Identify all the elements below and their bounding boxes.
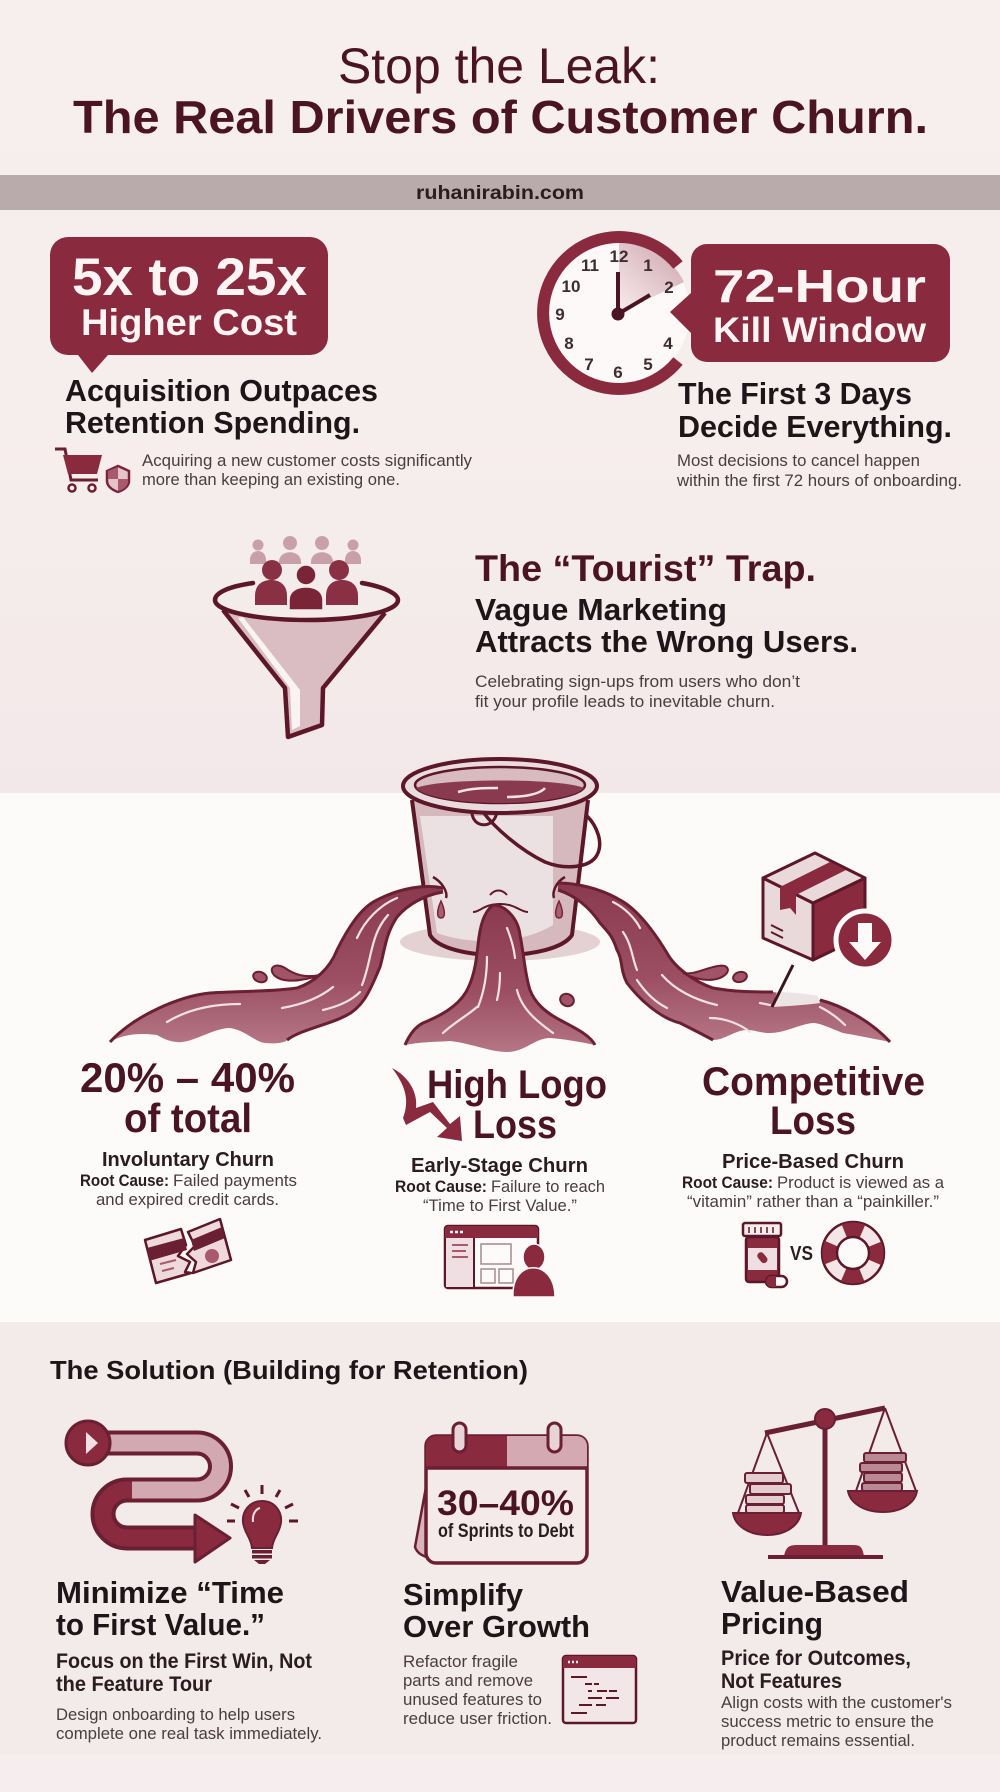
heading: minimize time to first value: Minimize “Time [56, 1575, 284, 1610]
text: early-stage root cause: Failure to reach [491, 1178, 605, 1196]
column: value-based pricing [721, 1408, 952, 1750]
icon: clock [543, 237, 690, 389]
text: price-based root cause: “vitamin” rather than a “painkiller.” [687, 1193, 939, 1211]
subheading: focus on first win: Focus on the First Win, Not [56, 1649, 312, 1673]
icon: box with down arrow [763, 853, 894, 969]
panel: the solution [50, 1355, 952, 1750]
text: refactor body: unused features to [403, 1690, 542, 1709]
stat: 20-40 percent: 20% – 40% [80, 1054, 295, 1101]
icon: clock: 10 [562, 277, 580, 296]
subheading: focus on first win: the Feature Tour [56, 1672, 213, 1696]
text: tourist body: fit your profile leads to inevitable churn. [475, 693, 775, 711]
icon: balance scale [733, 1408, 917, 1557]
heading: value-based pricing: Pricing [721, 1606, 823, 1641]
heading: competitive loss: Competitive [702, 1060, 925, 1104]
subheading: vague marketing: Vague Marketing [475, 592, 727, 627]
leak stream: center [405, 905, 595, 1052]
panel: tourist trap [215, 536, 858, 737]
text: vs: VS [790, 1243, 813, 1265]
heading: value-based pricing [721, 1574, 909, 1641]
pointer line to stream [772, 965, 793, 1007]
text: pricing body: product remains essential. [721, 1731, 915, 1750]
leak stream: right [558, 883, 890, 1042]
speech bubble: 72-hour kill window: Kill Window [713, 311, 927, 350]
website band [0, 175, 1000, 210]
website band: ruhanirabin.com [416, 182, 584, 204]
icon: clock: 1 [643, 256, 653, 275]
text: price-based root cause [682, 1174, 945, 1211]
panel: price-based churn [682, 1060, 945, 1287]
leak stream: left [110, 886, 443, 1043]
heading: simplify over growth: Simplify [403, 1577, 524, 1612]
heading: the solution: The Solution (Building for Retention) [50, 1355, 528, 1385]
speech bubble: 5x to 25x [50, 237, 328, 373]
icon: winding path arrow [66, 1421, 230, 1562]
subheading: price for outcomes: Price for Outcomes, [721, 1646, 911, 1670]
speech bubble: 72-hour kill window [670, 244, 950, 362]
icon: code window [563, 1656, 636, 1723]
heading: minimize time to first value [56, 1575, 284, 1642]
icon: funnel with users [215, 536, 398, 737]
text: 72 hour body: Most decisions to cancel happen [677, 452, 920, 470]
subheading: price-based churn: Price-Based Churn [722, 1150, 904, 1173]
icon: falling arrow [392, 1068, 462, 1141]
text: price-based root cause: Product is viewed as a [777, 1174, 945, 1192]
text: acquisition body: Acquiring a new customer costs significantly [142, 451, 472, 470]
heading: high logo loss: Loss [473, 1103, 557, 1147]
heading: first 3 days: The First 3 Days [678, 377, 912, 411]
text: onboarding body [56, 1705, 322, 1743]
text: involuntary root cause: and expired credit cards. [96, 1191, 279, 1209]
panel: 72 hour window [543, 237, 962, 490]
speech bubble: 72-hour kill window: 72-Hour [713, 260, 926, 312]
text: refactor body: reduce user friction. [403, 1709, 552, 1728]
panel: acquisition cost [50, 237, 472, 492]
heading: value-based pricing: Value-Based [721, 1574, 909, 1609]
subheading: price for outcomes [721, 1646, 911, 1693]
icon: calendar: of Sprints to Debt [438, 1521, 575, 1542]
icon: clock: 2 [664, 278, 674, 297]
icon: clock: 9 [555, 305, 565, 324]
text: pricing body: success metric to ensure the [721, 1712, 934, 1731]
heading: first 3 days: Decide Everything. [678, 410, 952, 444]
text: involuntary root cause: Failed payments [173, 1172, 297, 1190]
icon: vitamin bottle [743, 1223, 787, 1287]
icon: shopping cart [55, 449, 102, 492]
text: refactor body: Refactor fragile [403, 1652, 518, 1671]
text: pricing body: Align costs with the customer's [721, 1693, 952, 1712]
text: onboarding body: Design onboarding to help users [56, 1705, 295, 1724]
text: 72 hour body [676, 452, 962, 490]
stat: 20-40 percent [80, 1054, 295, 1141]
text: acquisition body [142, 451, 472, 489]
heading: acquisition outpaces retention: Acquisition Outpaces [65, 374, 378, 408]
icon: shield [107, 466, 129, 492]
icon: broken credit card [145, 1219, 231, 1283]
text: tourist body [475, 673, 800, 711]
heading: high logo loss: High Logo [427, 1063, 607, 1107]
subheading: focus on first win [56, 1649, 312, 1696]
text: 72 hour body: within the first 72 hours of onboarding. [676, 472, 962, 490]
text: tourist body: Celebrating sign-ups from users who don’t [475, 673, 800, 691]
illustration: leaking bucket [110, 759, 894, 1052]
heading: simplify over growth: Over Growth [403, 1609, 590, 1644]
title: Stop the Leak: [338, 38, 660, 94]
heading: acquisition outpaces retention: Retention Spending. [65, 406, 360, 440]
speech bubble: 5x to 25x: Higher Cost [81, 302, 297, 343]
bucket [403, 759, 600, 955]
icon: clock: 8 [564, 334, 574, 353]
heading: tourist trap: The “Tourist” Trap. [475, 548, 816, 589]
subheading: price for outcomes: Not Features [721, 1669, 842, 1693]
subheading: vague marketing: Attracts the Wrong Users. [475, 624, 858, 659]
heading: high logo loss [427, 1063, 607, 1147]
text: onboarding body: complete one real task immediately. [56, 1724, 322, 1743]
subheading: involuntary churn: Involuntary Churn [102, 1148, 274, 1171]
icon: calendar [415, 1423, 587, 1563]
title [73, 38, 928, 143]
speech bubble: 5x to 25x: 5x to 25x [72, 248, 308, 307]
icon: clock: 12 [610, 247, 628, 266]
icon: clock: 11 [581, 256, 599, 275]
icon: clock: 7 [584, 355, 594, 374]
icon: clock: 6 [613, 363, 623, 382]
icon: app window with user [445, 1226, 555, 1297]
subheading: early-stage churn: Early-Stage Churn [411, 1154, 588, 1177]
panel: involuntary churn [80, 1054, 297, 1283]
icon: calendar: 30–40% [437, 1484, 574, 1523]
text: early-stage root cause [395, 1178, 605, 1215]
heading: competitive loss: Loss [770, 1099, 856, 1143]
stat: 20-40 percent: of total [124, 1095, 252, 1141]
heading: competitive loss [702, 1060, 925, 1143]
icon: light bulb [227, 1485, 298, 1564]
text: involuntary root cause [80, 1172, 297, 1209]
panel: early-stage churn [392, 1063, 607, 1297]
text: price-based root cause: Root Cause: [682, 1174, 773, 1192]
icon: lifebuoy [822, 1222, 884, 1284]
subheading: vague marketing [475, 592, 858, 659]
text: early-stage root cause: Root Cause: [395, 1178, 487, 1196]
text: refactor body [403, 1652, 552, 1728]
text: acquisition body: more than keeping an existing one. [142, 470, 400, 489]
heading: minimize time to first value: to First Value.” [56, 1607, 265, 1642]
column: simplify over growth [403, 1423, 636, 1728]
text: involuntary root cause: Root Cause: [80, 1172, 169, 1190]
icon: clock: 4 [663, 334, 673, 353]
column: minimize time to first value [56, 1421, 322, 1743]
heading: acquisition outpaces retention [65, 374, 378, 440]
splash droplets [252, 966, 748, 1008]
bucket shadow [400, 923, 600, 961]
heading: first 3 days [678, 377, 952, 444]
icon: clock: 5 [643, 355, 653, 374]
title: The Real Drivers of Customer Churn. [73, 91, 928, 143]
text: pricing body [721, 1693, 952, 1750]
text: early-stage root cause: “Time to First Value.” [423, 1197, 577, 1215]
heading: simplify over growth [403, 1577, 590, 1644]
text: refactor body: parts and remove [403, 1671, 533, 1690]
